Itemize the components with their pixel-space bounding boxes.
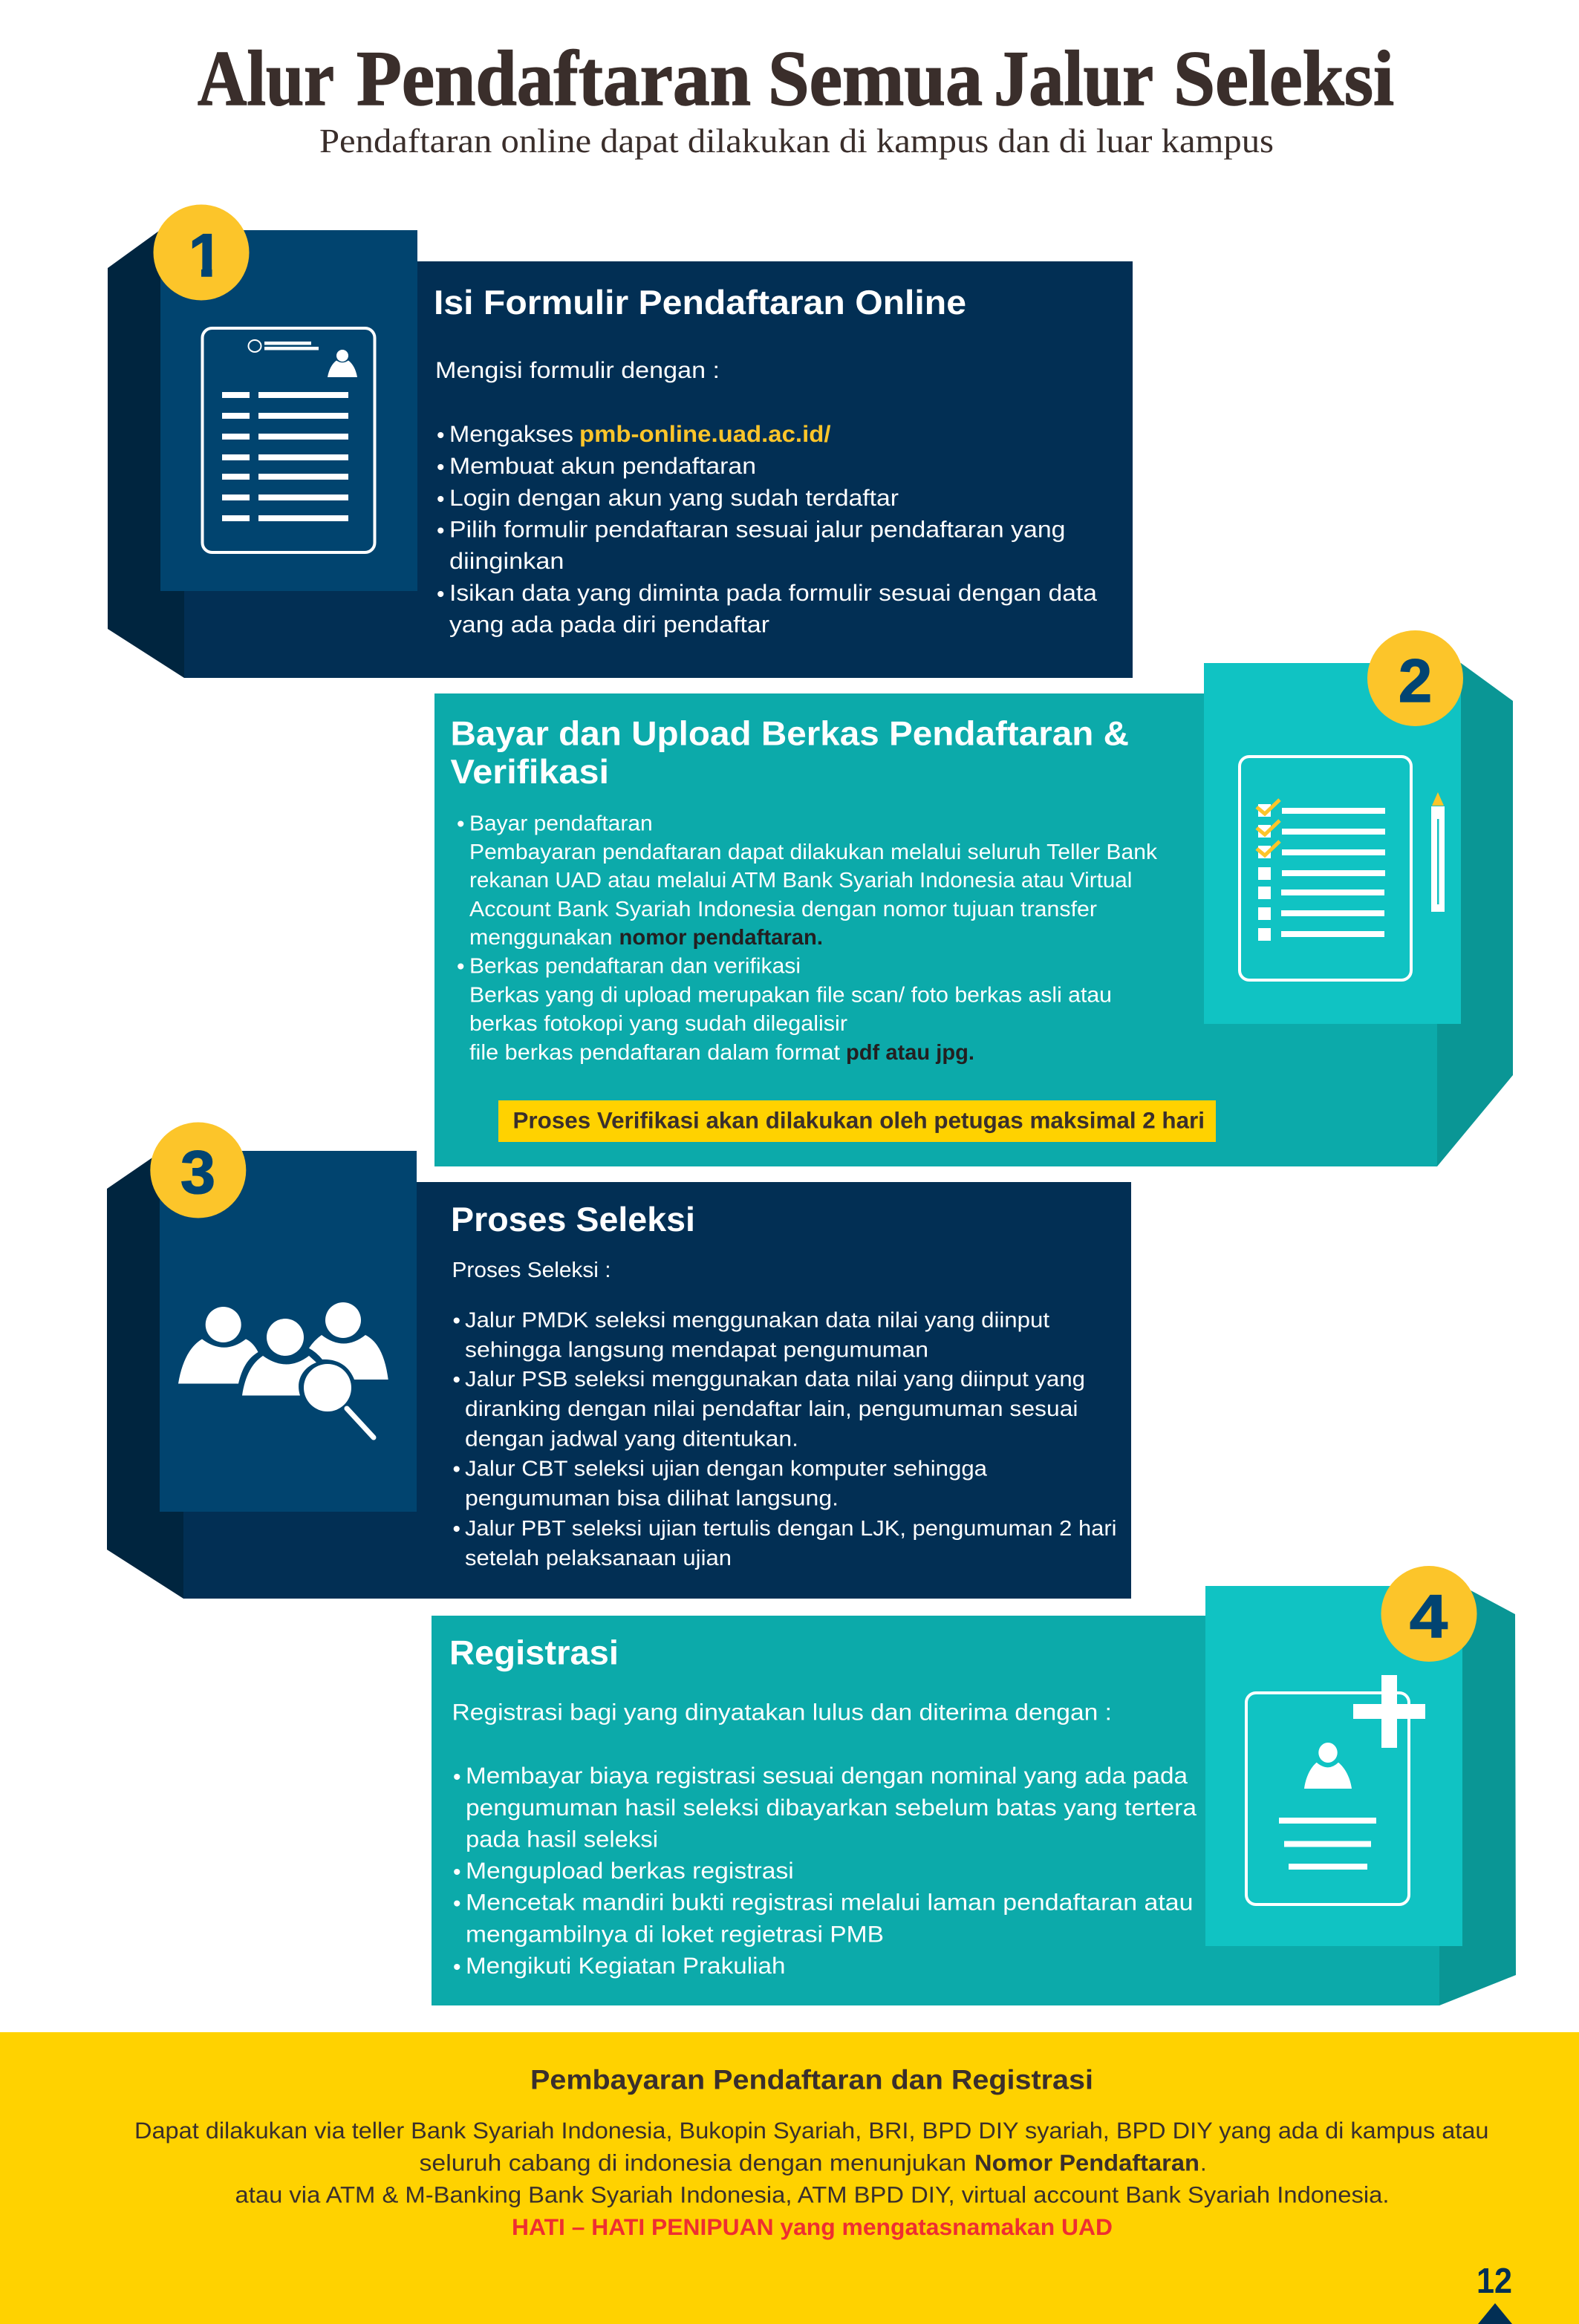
text block: step 1 instructions: yang ada pada diri pendaftar	[449, 612, 769, 637]
page number: 12	[1477, 2262, 1512, 2301]
panel: footer pembayaran	[0, 2032, 1579, 2324]
number badge 1	[153, 205, 250, 300]
text block: step 2 details: •	[457, 955, 465, 979]
heading: bayar dan upload	[450, 714, 1129, 791]
panel 1 icon face	[160, 230, 417, 591]
text block: step 2 details: Berkas yang di upload merupakan file scan/ foto berkas asli atau	[469, 983, 1112, 1007]
callout: proses verifikasi: Proses Verifikasi akan dilakukan oleh petugas maksimal 2 hari	[512, 1108, 1205, 1133]
text block: step 2 details: Account Bank Syariah Indonesia dengan nomor tujuan transfer	[469, 898, 1097, 921]
text block: step 2 details: •	[457, 812, 465, 836]
footer background	[0, 2032, 1579, 2324]
text block: step 4 details: Registrasi bagi yang dinyatakan lulus dan diterima dengan :	[452, 1699, 1112, 1726]
text block: step 1 instructions: diinginkan	[449, 548, 564, 574]
text block: step 1 instructions: •	[437, 423, 445, 448]
text block: step 2 details: berkas fotokopi yang sudah dilegalisir	[469, 1012, 847, 1036]
text block: step 4 details: Membayar biaya registrasi sesuai dengan nominal yang ada pada	[466, 1763, 1188, 1789]
text block: step 4 details: pengumuman hasil seleksi dibayarkan sebelum batas yang tertera	[466, 1795, 1197, 1821]
text block: step 4 details: •	[453, 1892, 461, 1916]
title: Jalur	[994, 35, 1153, 122]
text block: step 4 details: •	[453, 1860, 461, 1884]
icon: checklist document	[1240, 757, 1411, 980]
text block: step 2 details	[457, 812, 1158, 1065]
panel 4 side face	[1439, 1586, 1516, 2005]
text block: step 4 details: pada hasil seleksi	[466, 1827, 658, 1852]
text block: step 2 details: nomor pendaftaran.	[619, 926, 823, 950]
text block: step 2 details: file berkas pendaftaran dalam format	[469, 1041, 840, 1065]
number badge 2: 2	[1399, 647, 1432, 715]
text block: step 3 details: •	[453, 1457, 460, 1482]
panel 1 side face	[108, 231, 184, 678]
text block: step 4 details: •	[453, 1955, 461, 1979]
number badge 3: 3	[180, 1139, 215, 1207]
text block: step 1 instructions: Pilih formulir pendaftaran sesuai jalur pendaftaran yang	[449, 517, 1065, 542]
text block: step 2 details: menggunakan	[469, 926, 613, 950]
panel 1 body	[184, 261, 1133, 678]
number badge 1: 1	[189, 222, 223, 290]
text block: step 4 details: •	[453, 1765, 461, 1789]
text block: step 1 instructions: Mengakses	[449, 421, 573, 447]
text block: step 3 details: Jalur PMDK seleksi menggunakan data nilai yang diinput	[465, 1308, 1049, 1332]
callout: proses verifikasi	[498, 1100, 1216, 1142]
number badge 2	[1367, 630, 1463, 726]
number badge 4	[1381, 1566, 1477, 1662]
text block: step 2 details: pdf atau jpg.	[846, 1041, 974, 1065]
icon: registration document	[1246, 1675, 1425, 1904]
title: Alur	[198, 35, 334, 122]
panel 3 icon face	[160, 1151, 417, 1512]
panel: step 1 isi formulir	[108, 205, 1133, 678]
subtitle: Pendaftaran online dapat dilakukan di kampus dan di luar kampus	[319, 122, 1274, 160]
panel 2 icon face	[1204, 663, 1461, 1024]
footer text block: Dapat dilakukan via teller Bank Syariah Indonesia, Bukopin Syariah, BRI, BPD DIY syariah, BPD DIY yang ada di kampus atau	[134, 2118, 1489, 2144]
text block: step 3 details	[452, 1259, 1117, 1570]
text block: step 1 instructions: •	[437, 582, 445, 607]
arrow: page marker triangle	[1478, 2303, 1512, 2324]
panel 2 body	[434, 693, 1437, 1166]
heading: registrasi: Registrasi	[449, 1633, 619, 1672]
heading: proses seleksi: Proses Seleksi	[451, 1200, 695, 1238]
text block: step 1 instructions: pmb-online.uad.ac.id/	[579, 421, 831, 447]
text block: step 3 details: •	[453, 1517, 460, 1541]
title: Semua	[768, 35, 983, 122]
footer text block: .	[1200, 2150, 1207, 2176]
text block: step 1 instructions: Isikan data yang diminta pada formulir sesuai dengan data	[449, 580, 1098, 606]
panel: step 3 proses seleksi	[107, 1123, 1131, 1599]
text block: step 4 details	[452, 1699, 1197, 1979]
text block: step 1 instructions: •	[437, 455, 445, 480]
text block: step 1 instructions: Mengisi formulir dengan :	[435, 357, 720, 383]
text block: step 3 details: Proses Seleksi :	[452, 1259, 611, 1282]
icon: people with magnifier	[178, 1302, 388, 1437]
warning text: HATI – HATI PENIPUAN yang mengatasnamakan UAD	[512, 2214, 1113, 2240]
text block: step 3 details: pengumuman bisa dilihat langsung.	[465, 1486, 839, 1510]
text block: step 4 details: Mengikuti Kegiatan Prakuliah	[466, 1953, 786, 1979]
text block: step 3 details: •	[453, 1308, 460, 1334]
text block: step 2 details: rekanan UAD atau melalui ATM Bank Syariah Indonesia atau Virtual	[469, 869, 1132, 892]
heading: isi formulir: Isi Formulir Pendaftaran Online	[434, 283, 966, 321]
title: Seleksi	[1173, 35, 1394, 122]
text block: step 1 instructions: •	[437, 487, 445, 512]
panel 2 side face	[1437, 663, 1513, 1166]
text block: step 1 instructions: •	[437, 518, 445, 544]
footer text block: atau via ATM & M-Banking Bank Syariah Indonesia, ATM BPD DIY, virtual account Bank Syariah Indonesia.	[235, 2182, 1389, 2208]
footer text block	[134, 2118, 1489, 2208]
number badge 3	[150, 1123, 246, 1218]
footer text block: Nomor Pendaftaran	[974, 2150, 1199, 2176]
text block: step 4 details: Mencetak mandiri bukti registrasi melalui laman pendaftaran atau	[466, 1890, 1193, 1916]
text block: step 1 instructions: Membuat akun pendaftaran	[449, 453, 756, 479]
footer heading: Pembayaran Pendaftaran dan Registrasi	[530, 2064, 1093, 2095]
panel 4 body	[432, 1616, 1439, 2005]
text block: step 3 details: diranking dengan nilai pendaftar lain, pengumuman sesuai	[465, 1397, 1078, 1421]
text block: step 4 details: mengambilnya di loket regietrasi PMB	[466, 1921, 884, 1947]
panel 4 icon face	[1205, 1586, 1462, 1946]
text block: step 3 details: Jalur PBT seleksi ujian tertulis dengan LJK, pengumuman 2 hari	[465, 1517, 1117, 1541]
panel 3 side face	[107, 1153, 183, 1599]
footer text block: seluruh cabang di indonesia dengan menunjukan	[419, 2150, 966, 2176]
icon: pencil	[1431, 792, 1445, 912]
title	[198, 35, 1394, 122]
text block: step 3 details: dengan jadwal yang ditentukan.	[465, 1427, 798, 1451]
heading: bayar dan upload: Verifikasi	[450, 752, 609, 791]
heading: bayar dan upload: Bayar dan Upload Berkas Pendaftaran &	[450, 714, 1129, 753]
text block: step 2 details: Bayar pendaftaran	[469, 812, 653, 836]
text block: step 1 instructions: Login dengan akun yang sudah terdaftar	[449, 485, 899, 511]
text block: step 4 details: Mengupload berkas registrasi	[466, 1858, 794, 1884]
text block: step 1 instructions	[435, 357, 1098, 637]
text block: step 3 details: setelah pelaksanaan ujian	[465, 1547, 732, 1570]
text block: step 3 details: Jalur PSB seleksi menggunakan data nilai yang diinput yang	[465, 1368, 1085, 1391]
panel 3 body	[183, 1182, 1131, 1599]
text block: step 3 details: sehingga langsung mendapat pengumuman	[465, 1338, 928, 1362]
text block: step 2 details: Pembayaran pendaftaran dapat dilakukan melalui seluruh Teller Bank	[469, 841, 1158, 864]
text block: step 2 details: Berkas pendaftaran dan verifikasi	[469, 955, 801, 979]
title: Pendaftaran	[357, 35, 751, 122]
panel: step 2 bayar dan upload	[434, 630, 1513, 1166]
number badge 4: 4	[1410, 1583, 1448, 1651]
panel: step 4 registrasi	[432, 1566, 1516, 2005]
icon: form document	[202, 328, 374, 552]
text block: step 3 details: Jalur CBT seleksi ujian dengan komputer sehingga	[465, 1457, 988, 1481]
text block: step 3 details: •	[453, 1368, 460, 1392]
